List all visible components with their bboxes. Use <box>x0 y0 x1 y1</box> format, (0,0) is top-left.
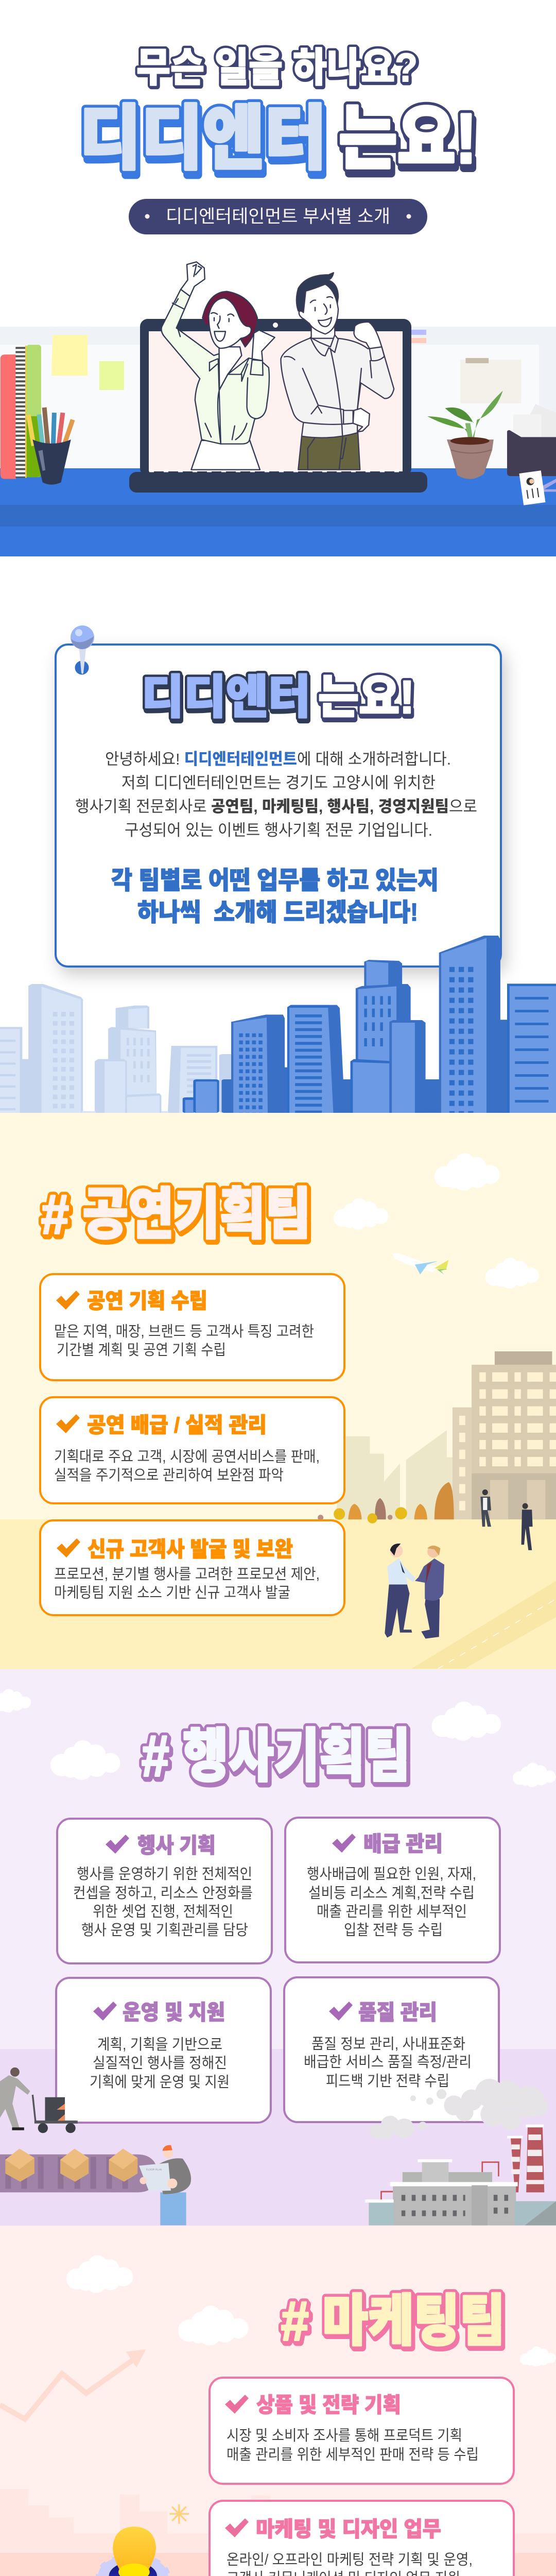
smoke <box>370 2079 548 2140</box>
heading: 행사기획팀: # 행사기획팀 <box>142 1724 410 1788</box>
icon: check <box>332 1834 356 1853</box>
conveyor with boxes <box>0 2149 158 2192</box>
right wall paper <box>460 358 522 403</box>
icon: light bulb in gear <box>97 2527 168 2576</box>
heading: 마케팅팀: # 마케팅팀 <box>281 2290 505 2352</box>
engineer with plan: FLOOR PLAN <box>146 2168 162 2172</box>
card: 행사 기획: 컨셉을 정하고, 리소스 안정화를 <box>73 1885 253 1902</box>
icon: check <box>93 2002 117 2021</box>
card: 행사 기획: 행사를 운영하기 위한 전체적인 <box>77 1866 252 1883</box>
마케팅팀 scenery <box>0 2255 556 2576</box>
card: 행사 기획 <box>57 1819 272 1963</box>
행사기획팀 clouds <box>0 1689 556 1787</box>
card: 신규 고객사 발굴 및 보완 <box>40 1520 344 1615</box>
icon: check <box>329 2002 353 2021</box>
card: 행사 기획: 행사 운영 및 기획관리를 담당 <box>81 1922 248 1939</box>
heading: 행사기획팀: # 행사기획팀 <box>143 1726 412 1790</box>
card: 배급 관리: 배급 관리 <box>363 1832 443 1856</box>
section background: hero <box>0 0 556 556</box>
icon: check <box>56 1414 80 1433</box>
hero heading <box>79 45 479 234</box>
card: 배급 관리: 매출 관리를 위한 세부적인 <box>317 1903 467 1920</box>
heading: 공연기획팀: # 공연기획팀 <box>41 1183 311 1245</box>
intro call to action <box>111 867 439 926</box>
card: 품질 관리 <box>284 1977 499 2122</box>
card: 행사 기획: 위한 셋업 진행, 전체적인 <box>93 1903 233 1920</box>
intro title: 디디엔터 <box>142 672 310 723</box>
hero office scene <box>0 262 556 556</box>
worker pushing cart <box>0 2067 78 2133</box>
card: 배급 관리: 설비등 리소스 계획,전략 수립 <box>308 1885 475 1902</box>
intro paragraph: 행사기획 전문회사로 공연팀, 마케팅팀, 행사팀, 경영지원팀으로 <box>75 798 477 816</box>
notebooks <box>1 345 41 479</box>
woman <box>161 262 275 470</box>
engineer with plan <box>139 2145 191 2225</box>
card: 마케팅 및 디자인 업무 <box>210 2501 514 2576</box>
intro title <box>142 672 415 726</box>
intro call to action: 각 팀별로 어떤 업무를 하고 있는지 <box>111 867 439 894</box>
intro title: 는요! <box>318 672 414 723</box>
intro call to action: 하나씩 소개해 드리겠습니다! <box>137 899 418 926</box>
clouds <box>66 2255 556 2367</box>
card: 운영 및 지원 <box>56 1978 271 2123</box>
subtitle: 무슨 일을 하나요? <box>136 45 418 90</box>
card: 배급 관리 <box>285 1818 500 1962</box>
card: 공연 기획 수립: 기간별 계획 및 공연 기획 수립 <box>57 1342 226 1359</box>
intro paragraph: 구성되어 있는 이벤트 행사기획 전문 기업입니다. <box>125 821 432 839</box>
card: 품질 관리: 피드백 기반 전략 수립 <box>326 2073 449 2090</box>
section background: 행사기획팀 <box>0 1669 556 2226</box>
heading: 공연기획팀: # 공연기획팀 <box>43 1185 312 1247</box>
pencil cup <box>28 408 73 485</box>
light buildings <box>0 984 234 1113</box>
plane <box>393 1253 448 1275</box>
handshake businessmen <box>385 1544 444 1639</box>
intro paragraph <box>75 750 477 839</box>
intro title: 는요! <box>319 674 415 726</box>
section background: 마케팅팀 <box>0 2226 556 2576</box>
autumn trees <box>318 1482 454 1523</box>
card: 배급 관리: 행사배급에 필요한 인원, 자재, <box>307 1866 476 1883</box>
card: 공연 기획 수립: 맡은 지역, 매장, 브랜드 등 고객사 특징 고려한 <box>54 1323 314 1340</box>
dark buildings <box>183 936 556 1113</box>
card: 상품 및 전략 기획: 매출 관리를 위한 세부적인 판매 전략 등 수립 <box>227 2446 479 2463</box>
pill: subtitle badge: 디디엔터테인먼트 부서별 소개 <box>166 207 390 227</box>
card: 신규 고객사 발굴 및 보완: 신규 고객사 발굴 및 보완 <box>88 1537 293 1561</box>
ID card <box>519 470 556 505</box>
card: 배급 관리: 입찰 전략 등 수립 <box>344 1922 443 1939</box>
intro title: 디디엔터 <box>142 672 310 723</box>
section background: 공연기획팀 <box>0 1113 556 1669</box>
main title <box>79 99 479 183</box>
subtitle: 무슨 일을 하나요? <box>136 45 418 90</box>
heading: 마케팅팀: # 마케팅팀 <box>283 2292 507 2354</box>
subtitle: 무슨 일을 하나요? <box>137 46 419 91</box>
man <box>281 273 394 470</box>
main title: 디디엔터 <box>81 105 328 183</box>
icon: check <box>225 2395 249 2414</box>
intro paragraph: 저희 디디엔터테인먼트는 경기도 고양시에 위치한 <box>121 774 436 792</box>
beige office building <box>453 1351 556 1519</box>
panel: intro card <box>56 625 501 967</box>
card: 신규 고객사 발굴 및 보완: 마케팅팀 지원 소스 기반 신규 고객사 발굴 <box>54 1585 290 1601</box>
card: 공연 배급 / 실적 관리: 공연 배급 / 실적 관리 <box>87 1413 267 1437</box>
document tray <box>507 404 556 476</box>
card: 공연 배급 / 실적 관리: 실적을 주기적으로 관리하여 보완점 파악 <box>54 1467 284 1484</box>
card: 상품 및 전략 기획: 상품 및 전략 기획 <box>256 2393 401 2417</box>
pill: subtitle badge <box>129 199 427 234</box>
illustration: two cheering coworkers <box>161 262 394 470</box>
icon: spark <box>169 2504 189 2524</box>
card: 운영 및 지원: 실질적인 행사를 정해진 <box>93 2055 227 2072</box>
card: 품질 관리: 품질 정보 관리, 사내표준화 <box>311 2036 465 2053</box>
card: 마케팅 및 디자인 업무: 마케팅 및 디자인 업무 <box>256 2517 441 2541</box>
section background: intro <box>0 556 556 1113</box>
card: 운영 및 지원: 기획에 맞게 운영 및 지원 <box>90 2074 230 2091</box>
potted plant <box>427 391 503 479</box>
card: 상품 및 전략 기획 <box>210 2378 514 2484</box>
card: 공연 배급 / 실적 관리: 기획대로 주요 고객, 시장에 공연서비스를 판매, <box>54 1448 320 1465</box>
intro title: 는요! <box>318 672 414 723</box>
clouds <box>334 1153 539 1289</box>
card: 운영 및 지원: 계획, 기획을 기반으로 <box>97 2036 222 2053</box>
card: 행사 기획: 행사 기획 <box>137 1834 216 1857</box>
intro paragraph: 안녕하세요! 디디엔터테인먼트에 대해 소개하려합니다. <box>105 750 451 768</box>
illustration: city skyline <box>0 936 556 1113</box>
card: 신규 고객사 발굴 및 보완: 프로모션, 분기별 행사를 고려한 프로모션 제안, <box>54 1566 320 1583</box>
laptop <box>129 319 427 493</box>
factory <box>365 2125 556 2225</box>
card: 마케팅 및 디자인 업무: 온라인/ 오프라인 마케팅 전략 기획 및 운영, <box>227 2551 473 2568</box>
card: 품질 관리: 배급한 서비스 품질 측정/관리 <box>304 2054 472 2071</box>
heading: 마케팅팀: # 마케팅팀 <box>281 2290 505 2352</box>
wall and desk <box>0 327 556 556</box>
icon: check <box>225 2518 249 2537</box>
main title: 는요! <box>339 99 477 178</box>
card: 운영 및 지원: 운영 및 지원 <box>123 2001 225 2024</box>
heading: 행사기획팀: # 행사기획팀 <box>142 1724 410 1788</box>
card: 공연 배급 / 실적 관리 <box>40 1397 344 1503</box>
growth arrow <box>0 2349 146 2419</box>
sticky notes <box>51 330 426 390</box>
icon: check <box>56 1291 80 1310</box>
icon: check <box>57 1538 80 1557</box>
main title: 는요! <box>339 99 477 178</box>
pale city <box>335 1430 453 1519</box>
card: 공연 기획 수립 <box>40 1274 344 1380</box>
card: 품질 관리: 품질 관리 <box>358 2001 437 2024</box>
small pedestrians <box>480 1489 533 1550</box>
card: 공연 기획 수립: 공연 기획 수립 <box>87 1289 207 1313</box>
intro title: 디디엔터 <box>143 674 311 726</box>
공연기획팀 scenery <box>318 1153 556 1669</box>
heading: 공연기획팀: # 공연기획팀 <box>41 1183 311 1245</box>
icon: check <box>106 1835 129 1854</box>
main title: 디디엔터 <box>79 99 326 178</box>
card: 상품 및 전략 기획: 시장 및 소비자 조사를 통해 프로덕트 기획 <box>227 2427 462 2444</box>
icon: push pin <box>71 625 94 675</box>
road <box>411 1581 556 1669</box>
main title: 디디엔터 <box>79 99 326 178</box>
pale skyline <box>0 2489 556 2553</box>
행사기획팀 factory scene <box>0 2067 556 2225</box>
main title: 는요! <box>341 105 479 183</box>
